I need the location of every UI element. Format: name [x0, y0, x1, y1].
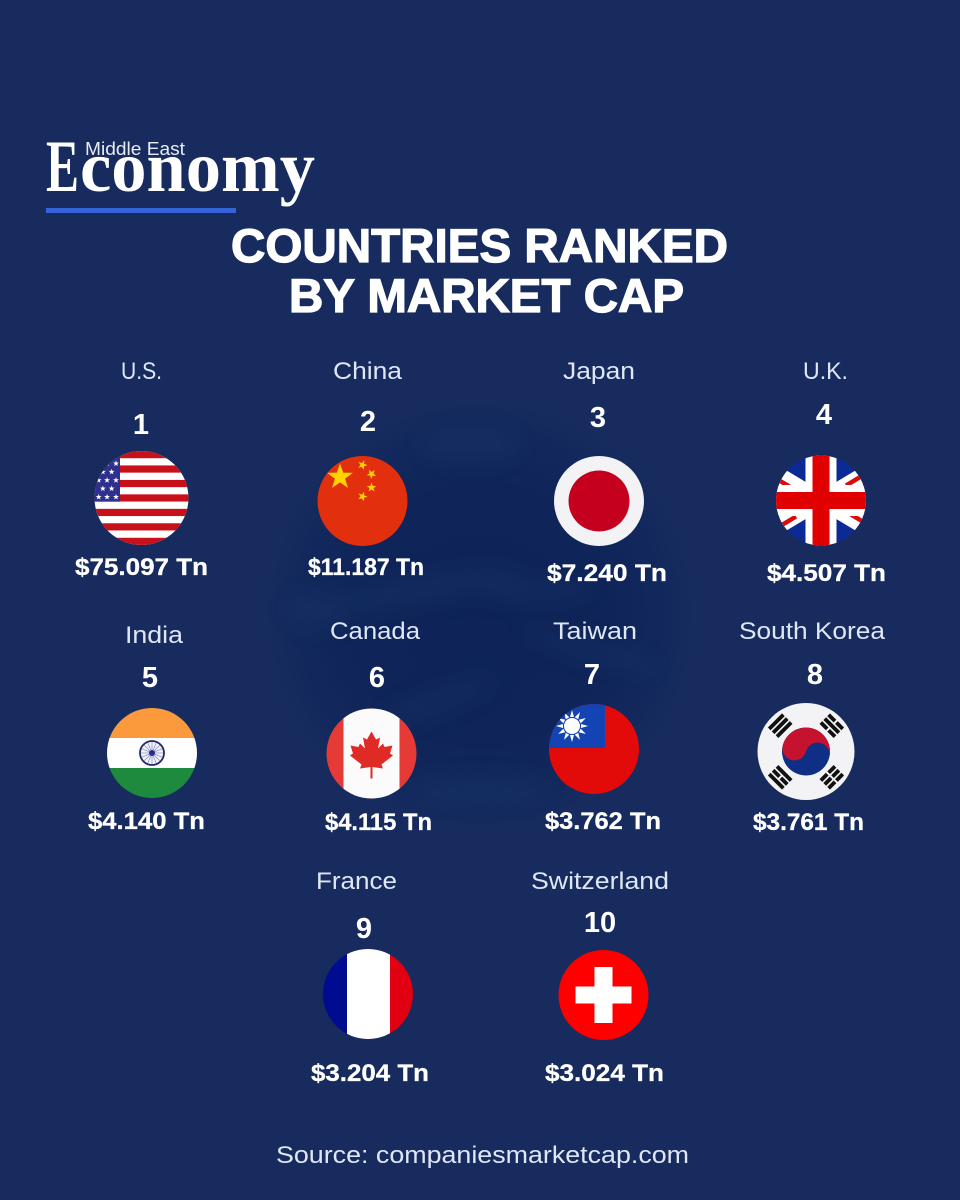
entry: France: France — [316, 868, 397, 895]
title: BY MARKET CAP — [289, 269, 684, 322]
entry: Japan: 3 — [590, 402, 606, 434]
entry: U.S.: $75.097 Tn — [75, 554, 208, 581]
entry: Canada: Canada — [330, 618, 421, 645]
entry: Switzerland: 10 — [584, 907, 616, 939]
entry: Taiwan — [545, 618, 661, 835]
entry: South Korea: 8 — [807, 659, 823, 691]
icon: Taiwan flag — [549, 704, 639, 794]
entry: U.S. — [75, 358, 208, 581]
entry: India — [88, 622, 205, 835]
entry: U.K. — [767, 362, 884, 584]
entry: U.K.: U.K. — [803, 358, 848, 385]
icon: India flag — [107, 708, 197, 798]
entry: China — [308, 358, 424, 581]
entry: Switzerland: $3.024 Tn — [545, 1060, 664, 1087]
entry: Japan — [547, 358, 667, 587]
entry: U.S.: U.S. — [121, 358, 162, 385]
icon: Canada flag — [326, 708, 416, 798]
entry: Canada — [325, 618, 432, 836]
entry: China: $11.187 Tn — [308, 554, 424, 581]
title: COUNTRIES RANKED — [231, 219, 728, 272]
entry: France: 9 — [356, 913, 372, 945]
logo: conomy — [80, 127, 315, 207]
icon: France flag — [323, 949, 413, 1039]
logo: Middle East — [85, 139, 185, 159]
entry: Japan: $7.240 Tn — [547, 560, 667, 587]
entry: India: 5 — [142, 662, 158, 694]
entry: Switzerland: Switzerland — [531, 868, 669, 895]
entry: India: India — [125, 622, 184, 649]
icon: UK flag — [776, 456, 866, 546]
icon: China flag — [318, 456, 408, 546]
entry: Canada: $4.115 Tn — [325, 809, 432, 836]
icon: Japan flag — [554, 456, 644, 546]
title — [231, 219, 728, 322]
entry: South Korea — [739, 618, 886, 836]
icon: Switzerland flag — [558, 950, 648, 1040]
entry: France — [311, 868, 429, 1087]
entry: South Korea: South Korea — [739, 618, 886, 645]
entry: Taiwan: 7 — [584, 659, 600, 691]
source: Source: companiesmarketcap.com — [276, 1142, 689, 1169]
icon: South Korea flag — [758, 703, 854, 800]
entry: South Korea: $3.761 Tn — [753, 809, 864, 836]
entry: Taiwan: Taiwan — [553, 618, 637, 645]
icon: US flag — [95, 451, 188, 545]
entry: Taiwan: $3.762 Tn — [545, 808, 661, 835]
entry: China: China — [333, 358, 403, 385]
entry: Switzerland — [531, 868, 669, 1087]
entry: Canada: 6 — [369, 662, 385, 694]
entry: France: $3.204 Tn — [311, 1060, 429, 1087]
entry: U.S.: 1 — [133, 409, 149, 441]
entry: U.K.: 4 — [816, 399, 832, 431]
entry: India: $4.140 Tn — [88, 808, 205, 835]
logo: E — [46, 126, 79, 208]
entry: Japan: Japan — [563, 358, 635, 385]
globe backdrop — [266, 400, 696, 830]
entry: U.K.: $4.507 Tn — [767, 560, 886, 587]
entry: China: 2 — [360, 406, 376, 438]
